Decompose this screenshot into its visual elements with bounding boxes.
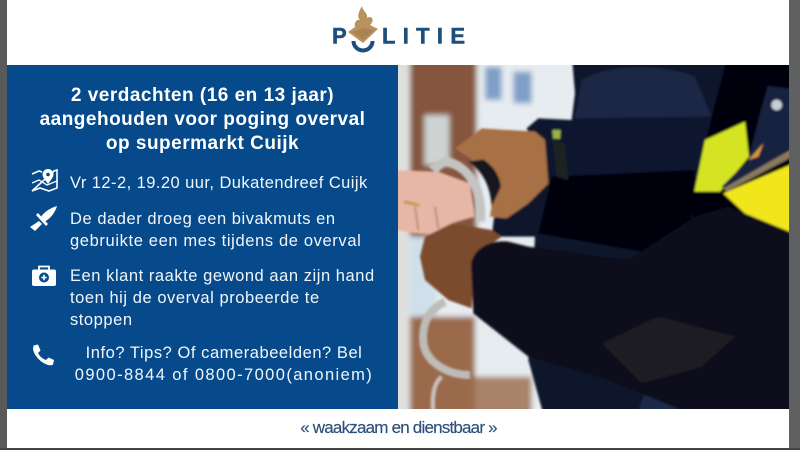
icon: flame emblem: [348, 6, 378, 50]
sleeve cuff patch: [552, 140, 568, 180]
logo wordmark: [332, 24, 465, 48]
black wrist band: [469, 159, 501, 207]
logo wordmark: LITIE: [382, 24, 465, 48]
logo: Politie: [332, 6, 465, 52]
logo wordmark: P: [332, 24, 347, 48]
handcuff lower: [423, 302, 470, 375]
suspect text: gebruikte een mes tijdens de overval: [70, 232, 361, 250]
photo background wall: [385, 50, 800, 423]
injury text: toen hij de overval probeerde te: [70, 289, 320, 307]
bottom screen edge: [0, 448, 800, 450]
contact text: Info? Tips? Of camerabeelden? Bel: [86, 344, 362, 362]
suspect hand: [388, 170, 475, 235]
officer sleeve: [471, 207, 800, 420]
handcuff upper: [428, 157, 485, 222]
upper officer hand: [455, 128, 548, 218]
heading: aangehouden voor poging overval: [40, 109, 365, 130]
suspect jacket: [492, 53, 800, 420]
panel: incident information: [7, 65, 398, 409]
police badge: [722, 86, 800, 190]
suspect text: [70, 210, 361, 250]
location text: Vr 12-2, 19.20 uur, Dukatendreef Cuijk: [70, 174, 368, 192]
injury text: stoppen: [70, 311, 133, 329]
left screen edge: [0, 0, 7, 450]
lower officer hand: [420, 223, 502, 308]
motto: « waakzaam en dienstbaar »: [300, 418, 497, 437]
icon: map with pin: [32, 168, 58, 192]
icon: first aid kit: [32, 266, 56, 286]
icon: telephone: [33, 344, 54, 366]
contact text: [75, 344, 373, 384]
yellow reflective vest: [694, 122, 749, 192]
injury text: [70, 267, 375, 329]
contact text: 0900-8844 of 0800-7000(anoniem): [75, 366, 373, 384]
heading: 2 verdachten (16 en 13 jaar): [71, 85, 334, 106]
photo: police officer handcuffing suspect: [398, 65, 789, 409]
injury text: Een klant raakte gewond aan zijn hand: [70, 267, 375, 285]
icon: knife: [30, 206, 57, 231]
officer vest: [692, 53, 800, 420]
heading: [40, 85, 365, 154]
right screen edge: [789, 0, 800, 450]
suspect text: De dader droeg een bivakmuts en: [70, 210, 336, 228]
heading: op supermarkt Cuijk: [106, 133, 299, 154]
